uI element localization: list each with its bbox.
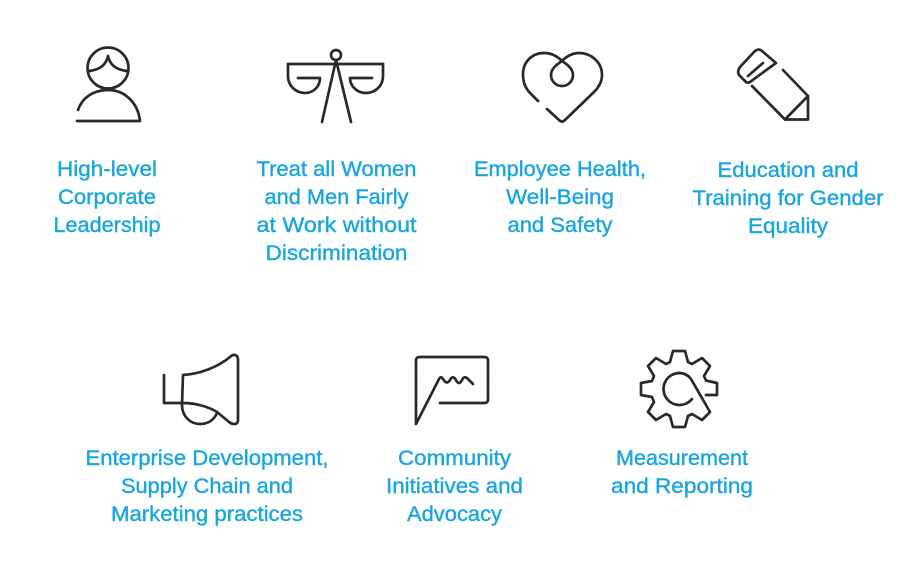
label: High-level Corporate Leadership: Corporate xyxy=(58,186,156,209)
label: Community Initiatives and Advocacy: Advocacy xyxy=(407,503,503,526)
label: Enterprise Development, Supply Chain and Marketing practices: Enterprise Development, xyxy=(86,447,328,470)
label: Treat all Women and Men Fairly: and Men Fairly xyxy=(264,186,409,209)
label: Measurement and Reporting xyxy=(611,447,753,498)
label: Education and Training for Gender Equality xyxy=(692,159,884,238)
icon: heart xyxy=(523,53,602,122)
label: High-level Corporate Leadership xyxy=(54,158,160,237)
icon: pencil xyxy=(738,50,808,120)
label: Enterprise Development, Supply Chain and Marketing practices: Supply Chain and xyxy=(121,475,293,498)
label: Employee Health, Well-Being and Safety: Well-Being xyxy=(506,186,614,209)
label: Measurement and Reporting: Measurement xyxy=(616,447,748,470)
label: Treat all Women and Men Fairly: Discrimination xyxy=(266,242,408,265)
label: Education and Training for Gender Equality: Education and xyxy=(718,159,858,182)
label: Community Initiatives and Advocacy: Initiatives and xyxy=(386,475,523,498)
label: High-level Corporate Leadership: Leadership xyxy=(54,214,160,237)
icon: gear with magnifier loop xyxy=(641,351,717,427)
label: Treat all Women and Men Fairly xyxy=(256,158,417,265)
label: Community Initiatives and Advocacy xyxy=(386,447,523,526)
label: Community Initiatives and Advocacy: Community xyxy=(398,447,512,470)
label: Education and Training for Gender Equality: Equality xyxy=(748,215,829,238)
label: Treat all Women and Men Fairly: Treat all Women xyxy=(256,158,416,181)
label: Education and Training for Gender Equality: Training for Gender xyxy=(692,187,884,210)
label: Measurement and Reporting: and Reporting xyxy=(611,475,753,498)
label: Employee Health, Well-Being and Safety: Employee Health, xyxy=(474,158,646,181)
icon: balance scales xyxy=(288,50,383,122)
label: Employee Health, Well-Being and Safety: and Safety xyxy=(508,214,613,237)
label: Employee Health, Well-Being and Safety xyxy=(474,158,646,237)
label: Enterprise Development, Supply Chain and Marketing practices xyxy=(86,447,328,526)
icon: megaphone xyxy=(164,355,238,424)
icon: speech bubble with signature xyxy=(416,357,488,424)
label: Enterprise Development, Supply Chain and Marketing practices: Marketing practices xyxy=(111,503,303,526)
label: High-level Corporate Leadership: High-level xyxy=(57,158,157,181)
icon: person xyxy=(77,48,140,121)
label: Treat all Women and Men Fairly: at Work without xyxy=(256,214,417,237)
